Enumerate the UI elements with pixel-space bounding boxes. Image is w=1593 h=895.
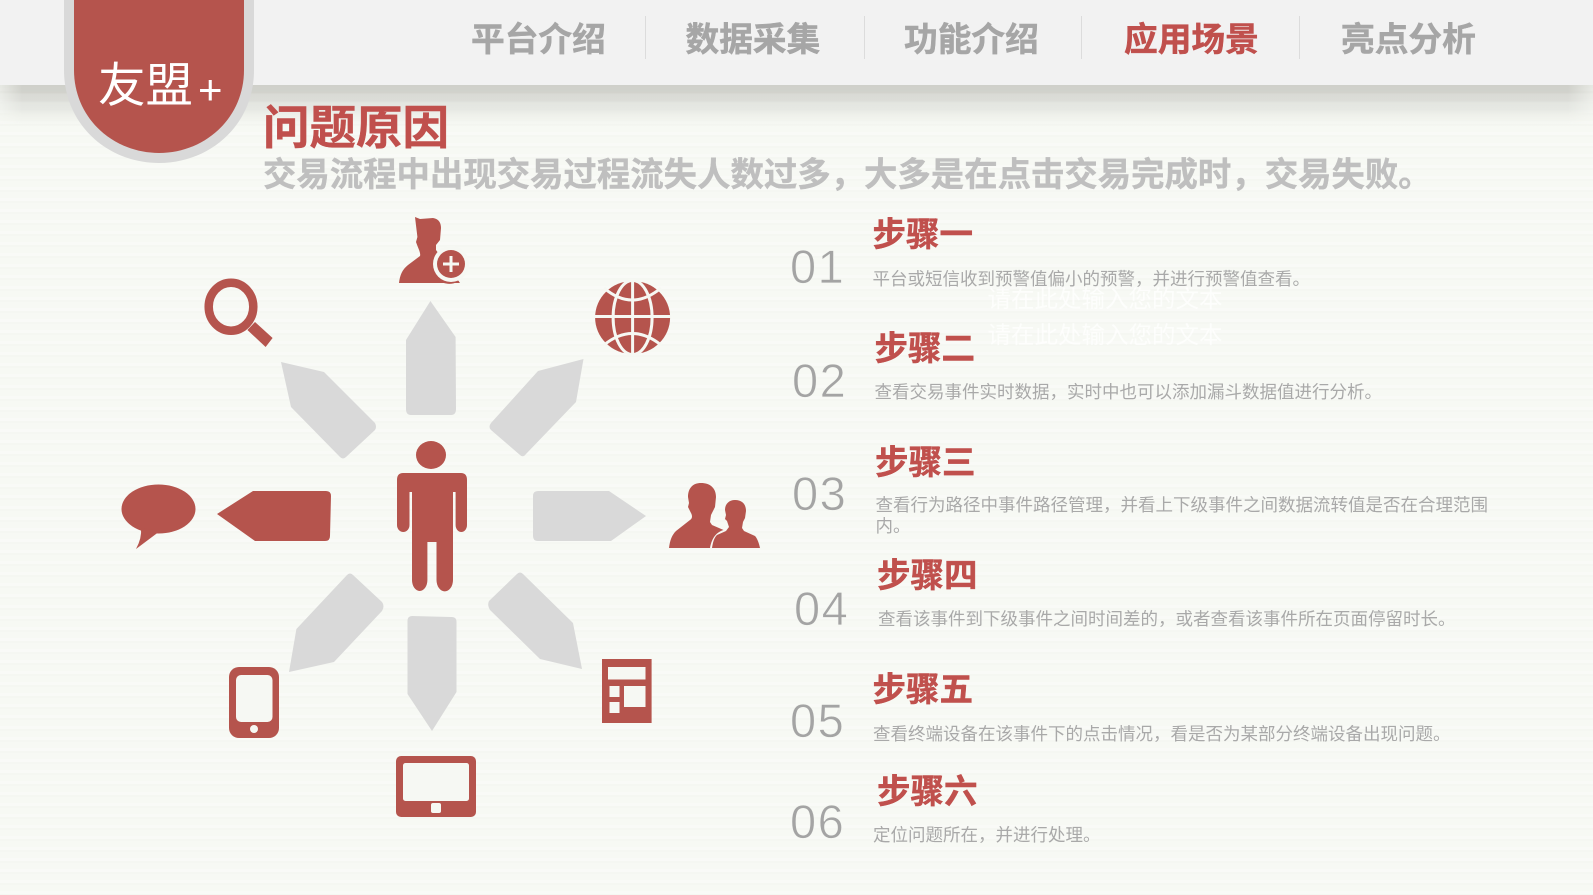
icon: phone <box>229 667 279 738</box>
step description: 平台或短信收到预警值偏小的预警，并进行预警值查看。 <box>872 269 1310 289</box>
nav item: highlights: 亮点分析 <box>1341 21 1476 59</box>
ghost placeholder text 1: 请在此处输入您的文本 <box>988 286 1222 312</box>
icon: globe <box>594 279 671 356</box>
step description: 查看终端设备在该事件下的点击情况，看是否为某部分终端设备出现问题。 <box>873 724 1450 744</box>
center person <box>397 441 467 591</box>
step number: 04 <box>794 582 849 635</box>
arrow: bottom-right <box>488 572 582 669</box>
logo badge <box>64 0 254 163</box>
nav item: features: 功能介绍 <box>904 21 1039 59</box>
step heading: 步骤六 <box>877 774 978 811</box>
step description: 定位问题所在，并进行处理。 <box>873 825 1100 845</box>
arrow: bottom-left <box>289 574 384 672</box>
arrow: right <box>533 491 646 541</box>
arrow: bottom <box>408 616 456 731</box>
step number: 01 <box>790 240 845 293</box>
icon: magnifier <box>209 283 273 347</box>
arrow: left (active) <box>217 491 331 541</box>
step 4 <box>794 558 1456 635</box>
step heading: 步骤三 <box>875 445 976 482</box>
logo text: 友盟+ <box>98 60 223 113</box>
step description: 内。 <box>876 516 910 536</box>
step number: 03 <box>792 467 847 520</box>
arrow: top-left <box>281 362 376 458</box>
step 3 <box>792 445 1488 536</box>
icon: two users <box>669 483 760 548</box>
nav item: scenarios (active): 应用场景 <box>1124 21 1259 59</box>
step heading: 步骤一 <box>872 217 973 254</box>
nav item: platform intro: 平台介绍 <box>471 21 606 59</box>
arrow: top <box>406 301 456 415</box>
step 1 <box>790 217 1310 293</box>
step description: 查看行为路径中事件路径管理，并看上下级事件之间数据流转值是否在合理范围 <box>876 495 1488 515</box>
step heading: 步骤五 <box>872 672 973 709</box>
title: 问题原因 <box>263 102 449 154</box>
ghost placeholder text 2: 请在此处输入您的文本 <box>988 322 1222 348</box>
navigation bar <box>0 0 1593 85</box>
step 2 <box>792 331 1382 407</box>
step heading: 步骤二 <box>874 331 975 368</box>
step description: 查看该事件到下级事件之间时间差的，或者查看该事件所在页面停留时长。 <box>878 609 1456 629</box>
arrow: top-right <box>490 359 584 456</box>
header shadow <box>0 85 1593 116</box>
step 6 <box>790 774 1100 848</box>
step description <box>876 495 1488 536</box>
step number: 06 <box>790 795 845 848</box>
nav item: data collection: 数据采集 <box>686 21 820 59</box>
icon: speech bubble <box>122 484 196 549</box>
icon: tablet <box>396 756 476 817</box>
step 5 <box>790 672 1450 747</box>
step description: 查看交易事件实时数据，实时中也可以添加漏斗数据值进行分析。 <box>874 382 1382 402</box>
step number: 02 <box>792 354 847 407</box>
icon: calculator layout <box>602 659 652 723</box>
step heading: 步骤四 <box>877 558 978 595</box>
step number: 05 <box>790 694 845 747</box>
icon: add user <box>399 217 469 284</box>
subtitle: 交易流程中出现交易过程流失人数过多，大多是在点击交易完成时，交易失败。 <box>263 157 1432 194</box>
